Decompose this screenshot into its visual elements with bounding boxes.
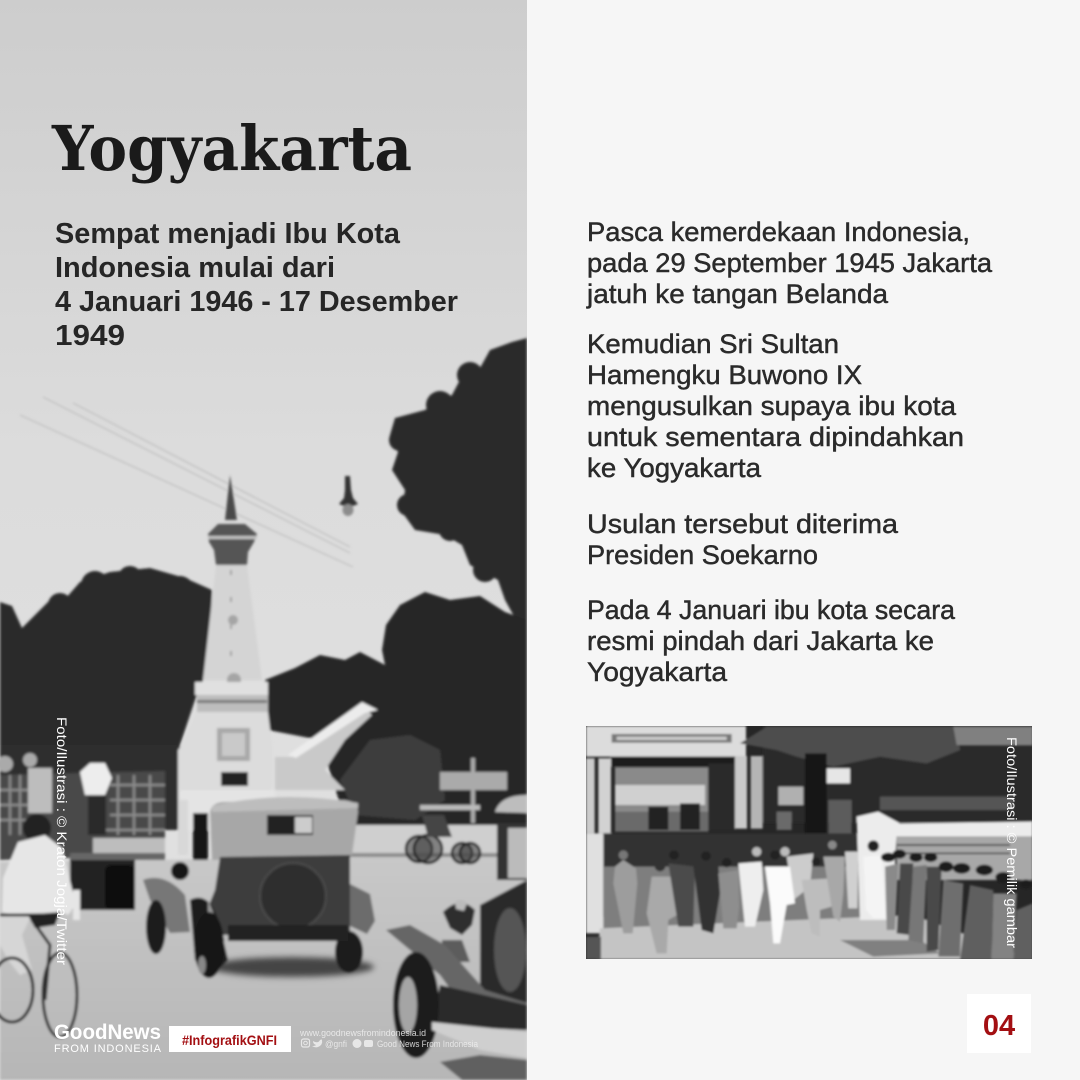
upper right tree xyxy=(390,338,527,640)
page number xyxy=(967,994,1031,1053)
subtitle xyxy=(55,218,458,352)
people on truck xyxy=(80,763,112,795)
wall xyxy=(350,825,497,855)
trees and background xyxy=(762,744,1032,824)
text block: paragraph 4 xyxy=(587,595,956,687)
text block: paragraph 4: resmi pindah dari Jakarta ke xyxy=(587,626,934,656)
central car xyxy=(210,957,374,977)
website and social handles: www.goodnewsfromindonesia.id xyxy=(299,1028,426,1038)
logo GoodNews xyxy=(54,1021,162,1055)
text block: paragraph 4: Pada 4 Januari ibu kota secara xyxy=(587,595,956,625)
text block: paragraph 4: Yogyakarta xyxy=(587,657,728,687)
middle right tree xyxy=(264,590,527,827)
sign and trishaw xyxy=(440,772,507,790)
logo GoodNews: FROM INDONESIA xyxy=(54,1043,162,1055)
text block: paragraph 2: mengusulkan supaya ibu kota xyxy=(587,391,957,421)
wall and fence xyxy=(857,812,1033,920)
photo: procession at Gedung Agung xyxy=(586,726,1033,959)
subtitle: 1949 xyxy=(55,320,125,352)
procession group xyxy=(613,850,739,953)
page number: 04 xyxy=(983,1010,1015,1042)
text block: paragraph 1 xyxy=(586,217,993,309)
footer branding xyxy=(54,1021,478,1055)
house xyxy=(275,708,372,790)
truck with fence xyxy=(0,771,165,860)
left dark tree xyxy=(0,566,214,747)
logo GoodNews: GoodNews xyxy=(54,1021,161,1044)
hashtag badge: #InfografikGNFI xyxy=(182,1032,277,1048)
subtitle: Indonesia mulai dari xyxy=(55,252,335,284)
subtitle: Sempat menjadi Ibu Kota xyxy=(55,218,401,250)
right panel background xyxy=(527,0,1080,1080)
text block: paragraph 1: pada 29 September 1945 Jakarta xyxy=(587,248,993,278)
subtitle: 4 Januari 1946 - 17 Desember xyxy=(55,286,458,318)
right car xyxy=(480,880,527,1003)
text block: paragraph 1: jatuh ke tangan Belanda xyxy=(586,279,889,309)
website and social handles: @gnfi xyxy=(325,1039,347,1049)
text block: paragraph 3: Presiden Soekarno xyxy=(587,540,818,570)
lamp xyxy=(339,476,358,506)
text block: paragraph 2: ke Yogyakarta xyxy=(587,453,762,483)
hashtag badge xyxy=(169,1026,291,1052)
pavement xyxy=(597,915,1033,959)
text block: paragraph 1: Pasca kemerdekaan Indonesia, xyxy=(587,217,970,247)
ground xyxy=(602,832,859,868)
website and social handles xyxy=(299,1028,478,1049)
website and social handles: Good News From Indonesia xyxy=(377,1039,478,1049)
photo caption left: Foto/Ilustrasi : © Kraton Jogja/Twitter xyxy=(54,717,70,965)
line of guards xyxy=(881,849,1033,959)
photo caption right: Foto/Ilustrasi : © Pemilik gambar xyxy=(1004,737,1020,948)
text block: paragraph 2: Kemudian Sri Sultan xyxy=(587,329,839,359)
text block: paragraph 2 xyxy=(587,329,964,483)
panel: left photo of Tugu Yogyakarta street xyxy=(0,0,527,1080)
title: Yogyakarta xyxy=(51,112,412,185)
text block: paragraph 3: Usulan tersebut diterima xyxy=(587,509,899,539)
gate building xyxy=(586,726,746,757)
road xyxy=(0,855,527,1080)
cyclist xyxy=(23,814,51,842)
tugu monument xyxy=(225,475,237,520)
text block: paragraph 2: Hamengku Buwono IX xyxy=(587,360,862,390)
text block: paragraph 2: untuk sementara dipindahkan xyxy=(587,422,964,452)
text block: paragraph 3 xyxy=(587,509,899,570)
